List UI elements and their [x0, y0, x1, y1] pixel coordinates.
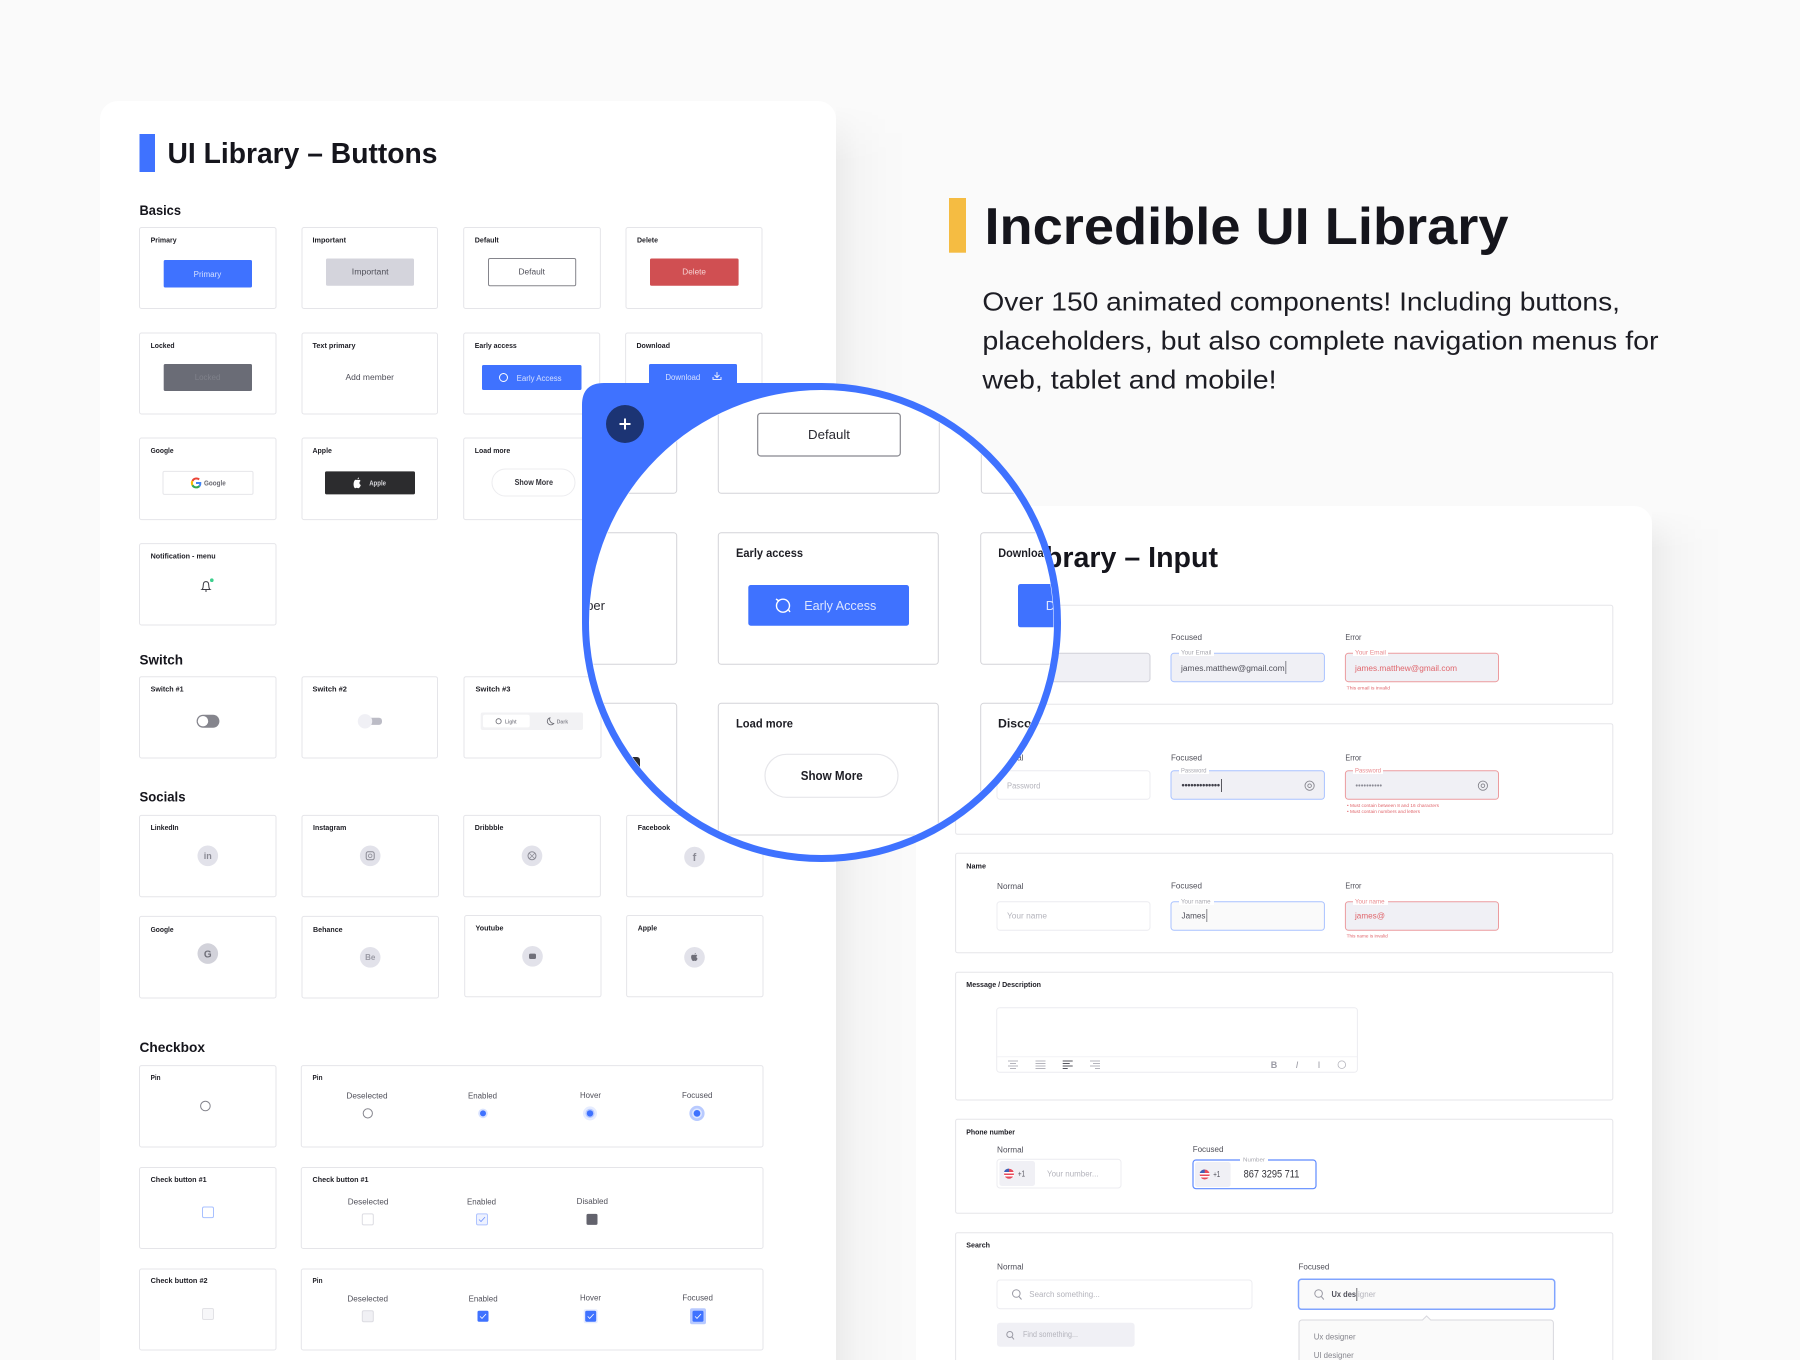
card: Text primary	[302, 333, 438, 414]
card: Facebook	[627, 815, 763, 897]
card: Primary	[140, 228, 276, 308]
card: Early access: Early Access	[517, 374, 562, 383]
card: Search	[956, 1233, 1613, 1360]
panel heading: UI Library Input: UI Library – Input	[983, 542, 1218, 574]
card: Email inputs: Focused	[1171, 633, 1202, 642]
card: Notification menu: Notification - menu	[151, 552, 216, 561]
card: Early access: Early access	[475, 341, 517, 350]
card: Pin radio states	[301, 1066, 763, 1147]
card: Search: Search	[966, 1240, 990, 1249]
card: Password inputs: Focused	[1171, 754, 1202, 763]
card: Switch 3: Switch #3	[476, 684, 510, 693]
card: Google social: Google	[151, 925, 174, 934]
card: Name inputs: James	[1182, 912, 1206, 921]
card: Early access	[464, 333, 600, 414]
icon: Google G	[192, 478, 200, 487]
card: Name inputs: Error	[1345, 881, 1362, 890]
card: Pin radio states: Hover	[580, 1091, 601, 1100]
accent bar	[949, 198, 966, 253]
card: Email inputs: james.matthew@gmail.com	[1180, 664, 1285, 673]
card: Phone number: Normal	[997, 1146, 1024, 1155]
magnified card: Download: Download	[998, 546, 1050, 560]
card: Search: igner	[1358, 1290, 1376, 1299]
description paragraph: Over 150 animated components! Including buttons,	[982, 287, 1620, 317]
card: Switch 3: Light	[505, 719, 517, 725]
section heading: Checkbox: Checkbox	[140, 1039, 205, 1055]
card: Phone number: Phone number	[966, 1127, 1015, 1136]
card: Email inputs: Your Email	[1181, 650, 1212, 657]
card: Pin checkbox states: Enabled	[469, 1295, 498, 1304]
card: Default: Default	[518, 268, 546, 277]
card: Check button 1 states: Check button #1	[312, 1175, 368, 1184]
card: Locked: Locked	[195, 373, 220, 382]
card: Password inputs: •••••••••••••	[1182, 780, 1220, 790]
card: Phone number: Your number...	[1047, 1170, 1098, 1179]
card: Download	[626, 333, 762, 414]
card: Pin checkbox states	[301, 1269, 763, 1350]
panel heading: UI Library Buttons: UI Library – Buttons	[168, 138, 438, 170]
card: Email inputs: Error	[1345, 633, 1362, 642]
card: Password inputs	[956, 724, 1613, 834]
magnified card: Early access: Early Access	[804, 598, 877, 613]
description paragraph: web, tablet and mobile!	[981, 364, 1277, 394]
card: Apple button	[302, 438, 438, 520]
icons: text toolbar: B	[1271, 1060, 1278, 1070]
card: Switch 3: Dark	[557, 719, 568, 725]
card: Behance: Behance	[313, 925, 343, 934]
card: Dribbble: Dribbble	[475, 823, 503, 832]
magnified button: Default	[758, 413, 900, 456]
card: Apple button: Apple	[312, 446, 332, 455]
card: Google button: Google	[204, 478, 226, 487]
card: Default	[464, 228, 600, 308]
card: Password inputs: Error	[1345, 754, 1362, 763]
card: Search: Focused	[1298, 1263, 1329, 1272]
card: Instagram: Instagram	[313, 823, 347, 832]
card: Check button 1 states: Enabled	[467, 1198, 496, 1207]
magnified card: Early access	[718, 533, 938, 664]
card: Check button 1 states: Deselected	[348, 1198, 388, 1207]
card: Check button 1 states: Disabled	[577, 1197, 608, 1206]
card: Delete: Delete	[637, 236, 658, 244]
card: Password inputs: Password	[1007, 781, 1040, 790]
panel: UI Library Buttons	[139, 134, 851, 1360]
card: Pin radio states: Enabled	[468, 1092, 497, 1101]
card: Behance: Be	[365, 953, 376, 962]
magnified content: member	[557, 598, 606, 613]
card: Name inputs: Normal	[997, 882, 1024, 891]
icon: eye error	[1478, 781, 1488, 790]
card: Check button 1	[140, 1168, 276, 1248]
card: Password inputs: Normal	[997, 754, 1024, 763]
magnified card: Discover: Discover	[998, 717, 1050, 731]
card: Delete	[626, 228, 762, 308]
card: Search: UI designer	[1314, 1351, 1354, 1360]
magnified card: Download	[980, 532, 1054, 665]
card: Name inputs: This name is invalid	[1347, 934, 1388, 939]
card: Check button 2	[140, 1269, 276, 1350]
card: Pin checkbox states: Focused	[682, 1294, 713, 1303]
card: Email inputs: This email is invalid	[1347, 685, 1390, 690]
card: Name inputs: Your name	[1355, 898, 1385, 905]
description paragraph	[981, 287, 1659, 394]
card: Google social	[140, 916, 276, 998]
card: Pin checkbox states: Hover	[580, 1294, 601, 1303]
heading block: Incredible UI Library	[949, 198, 1659, 394]
icon: search focused	[1315, 1290, 1324, 1300]
section heading: Basics: Basics	[140, 202, 181, 218]
card: Name inputs	[956, 853, 1613, 953]
magnified button: Default: Default	[808, 427, 850, 442]
card: Locked: Locked	[151, 341, 175, 350]
card: Youtube: Youtube	[476, 924, 504, 933]
icon: eye	[1305, 781, 1314, 790]
card: Primary: Primary	[194, 270, 221, 279]
card: Search: Normal	[997, 1263, 1024, 1272]
icon: US flag focused	[1200, 1169, 1210, 1180]
card: Name inputs: Name	[966, 861, 986, 870]
description paragraph: placeholders, but also complete navigation menus for	[982, 325, 1659, 355]
card: Pin radio states: Focused	[682, 1091, 712, 1100]
card: Password inputs: ••••••••••	[1356, 783, 1383, 790]
card: Search: Find something...	[1023, 1330, 1078, 1339]
card: Phone number: +1	[1213, 1170, 1221, 1179]
icons: text toolbar: I	[1318, 1060, 1320, 1070]
card: Youtube	[465, 916, 601, 997]
card: Instagram	[302, 815, 438, 897]
card: Load more	[464, 438, 600, 520]
card: Phone number: 867 3295 711	[1244, 1169, 1299, 1181]
card: Check button 1: Check button #1	[151, 1175, 207, 1184]
card: Text primary: Add member	[346, 373, 394, 382]
card: Search: Ux designer	[1314, 1332, 1356, 1341]
icon: search	[1012, 1290, 1022, 1300]
magnified card: Discover	[980, 702, 1039, 792]
card: Load more: Show More	[515, 478, 553, 487]
card: Pin radio states: Deselected	[346, 1092, 388, 1101]
card: Password inputs: Password	[1355, 769, 1381, 775]
main title: Incredible UI Library	[984, 198, 1509, 256]
magnified card: Load more	[718, 703, 938, 835]
card: Apple button: Apple	[369, 478, 386, 487]
card: Switch 2: Switch #2	[312, 684, 347, 693]
card: Primary: Primary	[151, 236, 177, 244]
card: Important: Important	[352, 268, 389, 277]
card: Email inputs: Your Email	[1355, 650, 1387, 657]
magnifier lens	[582, 383, 1061, 862]
card: Name inputs: james@	[1354, 912, 1385, 921]
panel: UI Library Input	[955, 533, 1667, 1360]
card: Download: Download	[636, 341, 670, 350]
magnified card: Load more: Load more	[736, 717, 793, 731]
card: LinkedIn: LinkedIn	[151, 823, 179, 832]
card: Password inputs: Password	[1181, 768, 1207, 775]
card: Name inputs: Your name	[1181, 898, 1211, 905]
magnified card: Download: D	[1046, 598, 1055, 613]
card: Download: Download	[665, 373, 700, 382]
card: Google button: Google	[151, 446, 174, 455]
card: Locked	[140, 333, 276, 414]
lens frame	[582, 383, 1061, 862]
card: Message description	[956, 972, 1613, 1100]
icons: text toolbar: I	[1296, 1060, 1299, 1070]
card: Password inputs: • Must contain numbers and letters	[1347, 809, 1421, 814]
card: Pin checkbox states: Pin	[312, 1276, 323, 1285]
card: LinkedIn: in	[204, 851, 212, 861]
card: Switch 2	[302, 677, 438, 758]
card: Facebook: f	[693, 852, 697, 864]
section heading: Socials: Socials	[140, 789, 186, 805]
card: Important	[302, 228, 438, 308]
magnified card: Load more: Show More	[801, 769, 863, 783]
card: Search: Ux des	[1332, 1290, 1357, 1299]
card: Apple social	[627, 916, 763, 997]
section heading: Switch: Switch	[140, 651, 183, 667]
card: Switch 1	[140, 677, 276, 758]
card: Facebook: Facebook	[638, 823, 671, 832]
card: Phone number: Number	[1243, 1157, 1265, 1163]
card: Pin radio: Pin	[151, 1073, 161, 1082]
card: Email inputs	[956, 605, 1613, 704]
card: Default: Default	[475, 236, 499, 244]
card: Load more: Load more	[475, 446, 510, 455]
card: Name inputs: Your name	[1007, 912, 1048, 921]
card: Dribbble	[464, 815, 600, 897]
card: Password inputs: • Must contain between 8 and 16 characters	[1347, 803, 1440, 808]
card: Phone number: +1	[1018, 1170, 1025, 1178]
icons: text toolbar	[1008, 1060, 1346, 1070]
magnified content	[590, 412, 1054, 836]
magnified card: Early access: Early access	[736, 546, 803, 560]
card: Name inputs: Focused	[1171, 881, 1202, 890]
card: Search: Search something...	[1029, 1290, 1100, 1299]
card: Pin radio	[140, 1066, 276, 1147]
card: Google button	[140, 438, 276, 520]
plus button	[606, 405, 644, 443]
card: Behance	[302, 916, 438, 998]
card: Check button 1 states	[301, 1168, 763, 1248]
card: Apple social: Apple	[638, 924, 657, 933]
card: Pin radio states: Pin	[312, 1073, 323, 1082]
card: Message description: Message / Description	[966, 980, 1041, 989]
icon: search find	[1007, 1332, 1014, 1339]
card: Delete: Delete	[682, 268, 707, 277]
card: Google social: G	[204, 949, 212, 960]
card: Phone number	[956, 1119, 1613, 1213]
card: Notification menu	[140, 544, 276, 625]
card: Text primary: Text primary	[312, 341, 356, 350]
icon: US flag	[1004, 1169, 1014, 1179]
card: Important: Important	[312, 236, 346, 244]
card: Email inputs: james.matthew@gmail.com	[1354, 664, 1457, 673]
card: Phone number: Focused	[1193, 1145, 1224, 1154]
card: Switch 3	[464, 677, 601, 758]
card: Pin checkbox states: Deselected	[347, 1295, 388, 1304]
card: LinkedIn	[140, 815, 276, 897]
card: Switch 1: Switch #1	[151, 684, 184, 693]
card: Check button 2: Check button #2	[151, 1276, 208, 1285]
